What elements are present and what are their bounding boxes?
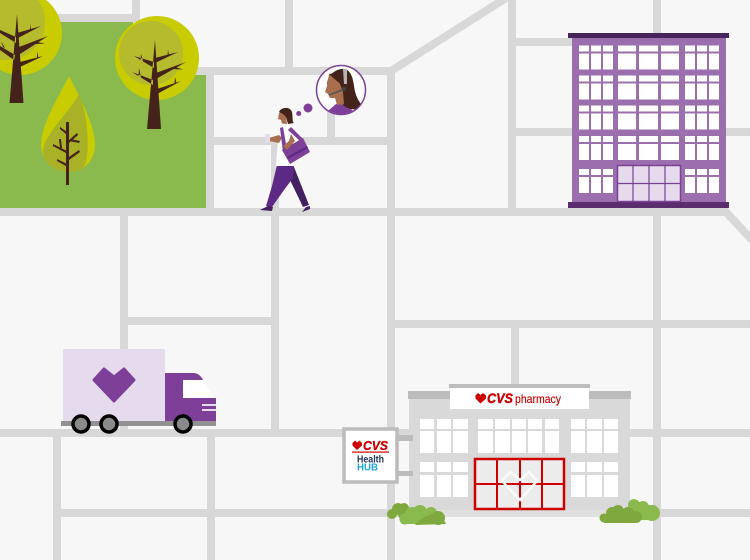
tree: top left round <box>0 0 62 103</box>
CVS HealthHUB sign: Health <box>357 454 384 466</box>
store sign: pharmacy <box>515 392 561 406</box>
CVS HealthHUB sign: CVS <box>363 438 388 453</box>
CVS HealthHUB sign: HUB <box>357 462 378 474</box>
park lawn <box>0 22 206 208</box>
store windows <box>420 419 618 497</box>
tree: round <box>115 16 199 129</box>
store door <box>475 459 564 509</box>
thought bubble: pharmacist with headset <box>316 66 366 118</box>
store sign <box>449 384 590 409</box>
delivery truck <box>61 349 216 432</box>
store sign: CVS <box>487 390 514 406</box>
sign arms <box>398 435 413 476</box>
bush: right <box>600 499 660 523</box>
office building <box>568 33 729 208</box>
CVS HealthHUB sign <box>344 429 397 482</box>
building entrance <box>617 165 681 202</box>
building windows <box>579 46 719 193</box>
CVS pharmacy store <box>408 384 631 517</box>
thought dots <box>296 104 312 116</box>
tree: teardrop <box>41 76 95 185</box>
icon: heart on truck <box>94 369 134 401</box>
bush: left <box>387 503 446 525</box>
woman walking <box>260 108 310 212</box>
